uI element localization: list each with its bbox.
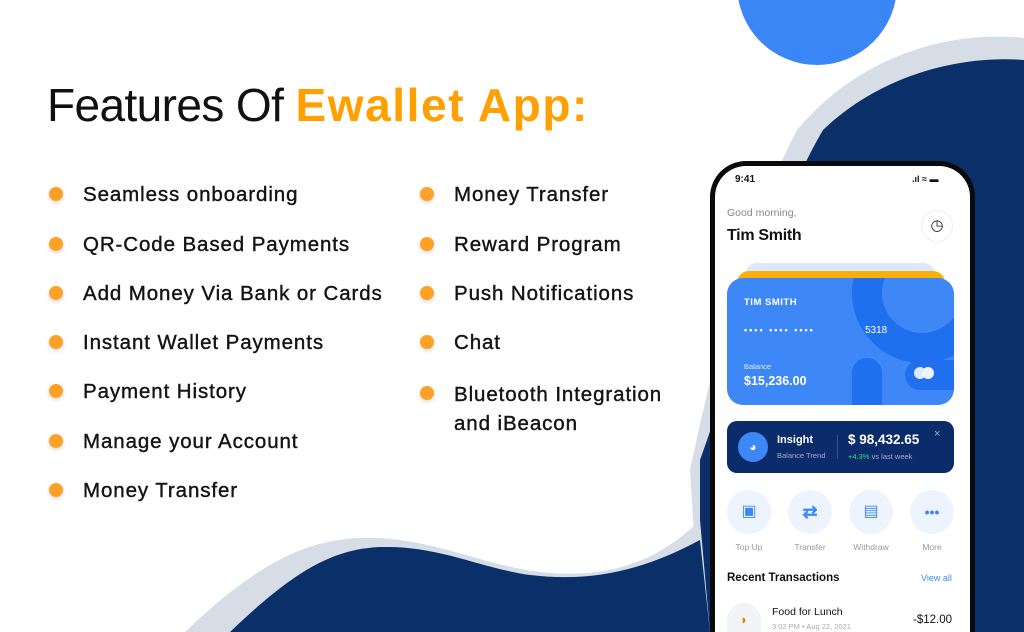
feature list left: Money Transfer [83,479,238,502]
feature list left: Add Money Via Bank or Cards [83,282,383,305]
icon: history clock: ◷ [930,217,944,234]
card stack [745,263,935,283]
insight panel: $ 98,432.65 [848,432,919,447]
blue circle top [737,0,897,65]
quick actions: Transfer [794,542,826,552]
card: •••• •••• •••• [744,325,815,335]
icon: history clock [921,210,953,242]
quick actions [727,490,954,552]
quick actions: ••• [925,504,939,520]
feature list right: Chat [454,331,501,354]
feature list left: Seamless onboarding [83,183,298,206]
feature list right: Push Notifications [454,282,634,305]
phone mockup: ◗ [740,612,748,627]
phone mockup: 3:02 PM • Aug 22, 2021 [772,622,851,631]
card: $15,236.00 [744,374,807,388]
quick actions: Top Up [736,542,762,552]
feature list right: Bluetooth Integration [454,383,662,406]
phone mockup: -$12.00 [913,614,952,626]
insight panel: ◕ [749,440,757,454]
greeting: Good morning, [727,207,796,219]
quick actions: ▤ [863,503,879,520]
insight panel: Balance Trend [777,451,825,460]
phone mockup: View all [921,573,952,583]
quick actions: ⇄ [802,502,818,522]
feature list left: Manage your Account [83,430,298,453]
insight panel: × [934,428,940,440]
phone mockup: .ıl ≈ ▬ [912,174,938,184]
phone mockup [710,161,975,632]
quick actions: Withdraw [853,542,889,552]
card [727,278,954,405]
feature list right: Money Transfer [454,183,609,206]
feature list right: Reward Program [454,233,622,256]
phone mockup: Food for Lunch [772,606,843,618]
card: 5318 [865,325,887,336]
insight panel: Insight [777,434,813,446]
feature list left: Payment History [83,380,247,403]
status bar: 9:41 [735,174,755,185]
feature list left: Instant Wallet Payments [83,331,324,354]
phone mockup: Tim Smith [727,227,801,244]
feature list right [418,183,662,435]
feature list right: and iBeacon [454,412,578,435]
quick actions: ▣ [741,503,757,520]
feature list left [48,183,383,502]
insight panel [727,421,954,473]
card: Balance [744,362,771,371]
feature list left: QR-Code Based Payments [83,233,350,256]
card: TIM SMITH [744,297,797,308]
title: Features Of Ewallet App: [47,79,589,131]
insight panel: +4.3% vs last week [848,452,912,461]
recent transactions: Recent Transactions [727,572,839,584]
quick actions: More [922,542,942,552]
